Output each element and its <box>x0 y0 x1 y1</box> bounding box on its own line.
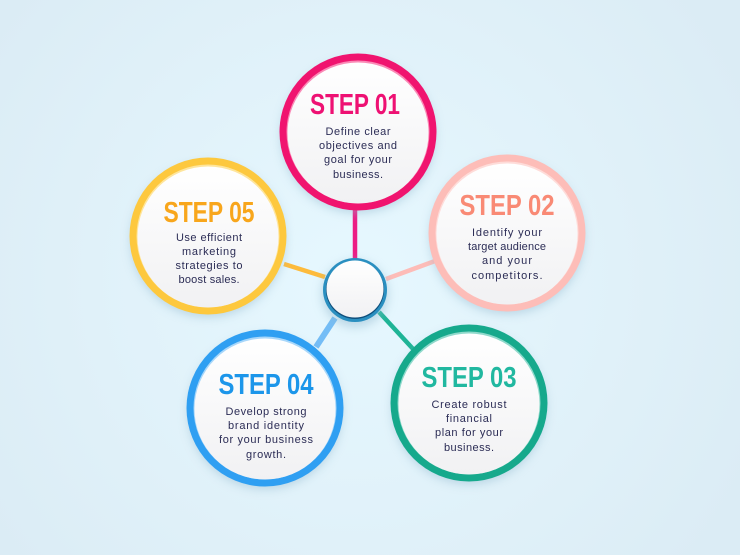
description <box>176 232 242 286</box>
center hub <box>322 258 388 327</box>
description: Create robust <box>432 399 506 411</box>
connector lines <box>284 205 435 350</box>
description: Identify your <box>472 227 542 239</box>
heading: STEP 03 <box>422 362 516 394</box>
description <box>319 126 397 181</box>
description: strategies to <box>176 260 242 272</box>
step 02 <box>428 154 586 314</box>
description: objectives and <box>319 140 397 152</box>
description: marketing <box>182 246 236 258</box>
description: financial <box>446 413 492 425</box>
description: business. <box>333 169 383 181</box>
heading: STEP 04 <box>218 369 314 401</box>
step 05 <box>130 158 286 317</box>
description <box>468 227 546 282</box>
description: competitors. <box>472 270 542 282</box>
description: for your business <box>219 434 314 446</box>
description: goal for your <box>324 154 392 166</box>
heading: STEP 05 <box>164 197 254 229</box>
description: business. <box>444 442 494 454</box>
description <box>432 399 506 454</box>
step 01 <box>280 54 436 213</box>
description <box>219 406 314 461</box>
step 03 <box>390 324 548 484</box>
step 04 <box>186 330 344 489</box>
description: plan for your <box>435 427 503 439</box>
description: boost sales. <box>178 274 240 286</box>
heading: STEP 02 <box>460 190 554 222</box>
description: Define clear <box>326 126 391 138</box>
description: growth. <box>246 449 286 461</box>
description: and your <box>482 255 532 267</box>
description: Develop strong <box>226 406 306 418</box>
heading: STEP 01 <box>310 89 400 121</box>
description: target audience <box>468 241 546 253</box>
description: Use efficient <box>176 232 242 244</box>
description: brand identity <box>228 420 304 432</box>
